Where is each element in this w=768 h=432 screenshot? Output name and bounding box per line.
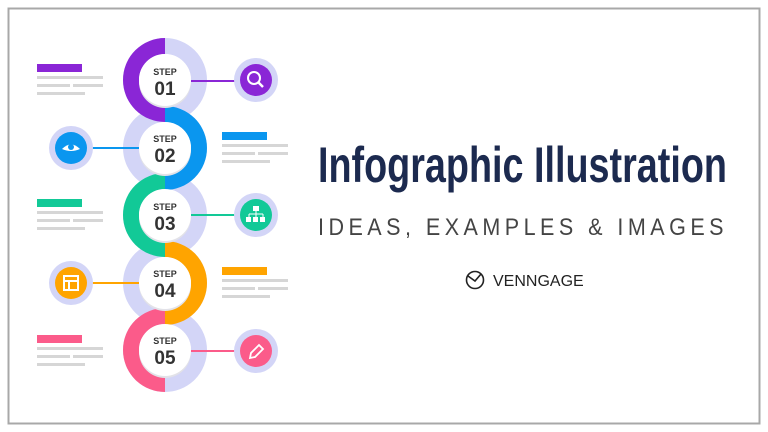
step 02 xyxy=(139,122,191,176)
step 01: STEP xyxy=(153,67,177,77)
icon: search xyxy=(191,58,278,102)
background rings xyxy=(131,46,199,384)
text block 5 xyxy=(37,335,103,366)
step 04 xyxy=(139,257,191,311)
icon: layout xyxy=(49,261,139,305)
text block 2 xyxy=(222,132,288,163)
text block 1 xyxy=(37,64,103,95)
step 03: STEP xyxy=(153,202,177,212)
text block 3 xyxy=(37,199,103,230)
icon: sitemap xyxy=(191,193,278,237)
step 04: 04 xyxy=(154,281,176,302)
S-curve colored arcs xyxy=(131,46,199,384)
step 05 xyxy=(139,324,191,378)
step 03 xyxy=(139,189,191,243)
step 02: 02 xyxy=(154,146,176,167)
step 05: STEP xyxy=(153,336,177,346)
logo: venngage: VENNGAGE xyxy=(493,273,584,290)
step 01: 01 xyxy=(154,79,176,100)
step 03: 03 xyxy=(154,214,176,235)
step 02: STEP xyxy=(153,134,177,144)
step 04: STEP xyxy=(153,269,177,279)
subtitle: IDEAS, EXAMPLES & IMAGES xyxy=(318,214,728,241)
step 01 xyxy=(139,54,191,108)
icon: pencil xyxy=(191,329,278,373)
icon: eye xyxy=(49,126,139,170)
step 05: 05 xyxy=(154,348,176,369)
text block 4 xyxy=(222,267,288,298)
